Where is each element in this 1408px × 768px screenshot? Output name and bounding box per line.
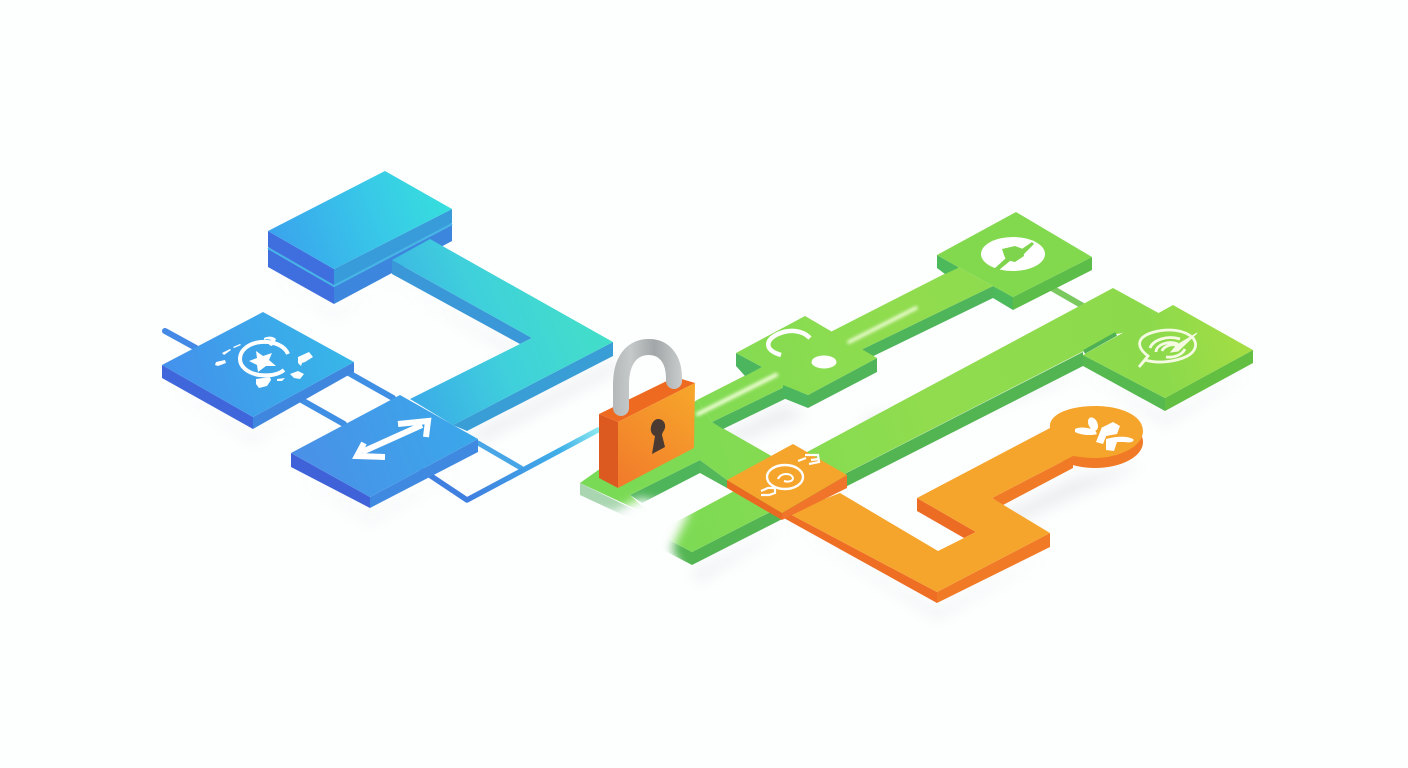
connector wires [165,331,598,500]
highlight streaks on upper band [698,308,916,414]
panel: clock tile [162,312,354,429]
keyhole [651,419,665,454]
icon: splash glyph [1075,416,1133,451]
base top face [580,400,775,518]
tile body [291,395,478,508]
channel top face [392,239,613,425]
icon: double arrow [357,421,428,457]
panel: blue channel to switch tile [392,239,613,431]
tile body [1083,305,1253,411]
path top face [788,406,1143,592]
path sides [782,416,1143,603]
block upper layer [268,171,452,285]
panel: green lock base [580,400,775,530]
panel: long green band [650,288,1175,565]
block seam [268,224,452,286]
band top face [697,267,993,422]
base sides [580,460,727,530]
band side [712,286,993,429]
tile body [162,312,354,429]
panel: right green tile [1083,305,1253,411]
slit between band and tile [1084,334,1116,352]
connector between green tiles [1043,283,1083,306]
band side [650,352,1083,565]
panel: orange junction tile [727,444,847,520]
tile body [727,444,847,520]
padlock [599,347,695,488]
panel: top green tile [937,212,1092,310]
ground shadows [165,275,1256,618]
lock body [599,377,695,488]
channel sides [392,260,613,431]
panel: blue source block [268,171,452,304]
band top face [650,288,1175,552]
icon: plug in circle [981,237,1045,271]
panel: C tile [736,316,877,408]
fade: base and band dissolving to white [560,498,690,590]
lock shackle [621,347,674,408]
panel: upper green band [697,267,993,429]
icon: clock with star [215,337,313,388]
panel: arrow tile [291,395,478,508]
block lower layer [268,225,452,304]
tile body [736,316,877,408]
panel: orange path with key head [782,406,1143,603]
tile body [937,212,1092,310]
icon: arc and dot [768,331,836,368]
icon: spiral speech bubble [1139,330,1197,367]
icon: ring with chain links [761,455,819,495]
